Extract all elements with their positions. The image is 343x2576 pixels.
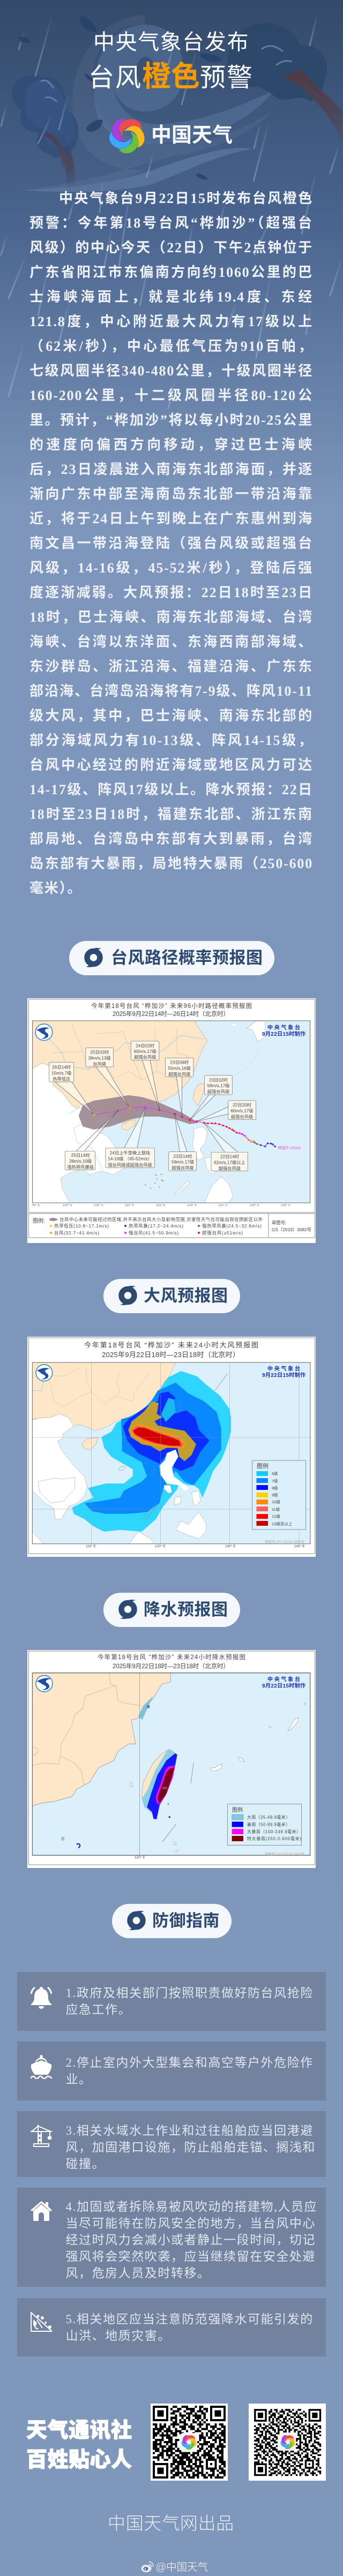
legend: 热带低压(10.8~17.1m/s) [54,1223,109,1229]
section heading: 大风预报图 [103,1279,240,1313]
text block: warning body: 级大风，其中，巴士海峡、南海东北部的 [29,708,313,724]
leader wedges [55,1060,238,1152]
text block: warning body: 岛东部有大暴雨，局地特大暴雨（250-600 [29,856,313,871]
longitude labels: 110° E [125,1204,135,1207]
guidance text: 应急工作。 [65,2003,131,2016]
chart: rainfall forecast map: 120° E [135,1855,145,1859]
credit: 中国天气网出品: 中国天气网出品 [108,2513,234,2533]
legend: rainfall levels: 特大暴雨(250.0-600毫米) [247,1836,301,1841]
longitude labels: 130° E [225,1544,236,1548]
map area: 38m/s,13级 [88,1056,111,1061]
forecast probability swath [79,1095,198,1129]
legend: rainfall levels: 大暴雨（100-249.9毫米） [247,1829,301,1834]
longitude labels: 140° E [294,1544,305,1548]
longitude labels: 100° E [63,1204,72,1207]
legend: gale levels: 7级 [272,1478,278,1483]
map area: 超强台风级 [134,1054,156,1060]
text block: warning body: 毫米）。 [29,880,82,896]
legend: gale levels: 8级 [272,1485,278,1490]
text block: warning body: 的速度向偏西方向移动，穿过巴士海峡 [29,437,313,453]
map title [91,1002,252,1018]
longitude labels: 130° E [250,1204,259,1207]
guidance text: 强风将会突然吹袭，应当继续留在安全处避 [65,2250,316,2263]
section heading: 防御指南 [112,1904,232,1938]
text block: warning body: 后，23日凌晨进入南海东北部海面，并逐 [29,462,313,477]
map area: 28m/s,10级 [69,1158,92,1164]
map title: 2025年9月22日18时—23日18时（北京时） [102,1351,240,1359]
slogan: 百姓贴心人 [26,2449,132,2472]
map area: 桦加沙 (2518) [278,1145,301,1150]
islands [147,1705,150,1708]
Luzon and Philippines [160,1450,189,1490]
icon: crane [31,2125,52,2147]
map title: 今年第18号台风 “桦加沙” 未来24小时降水预报图 [98,1653,245,1661]
track line [94,1107,275,1147]
gridlines [32,1362,310,1544]
legend: gale levels: 11级 [272,1507,280,1512]
agency stamp: 9月22日15时制作 [262,1682,305,1689]
gale level 11 [131,1426,184,1447]
text block: warning body: 预警：今年第18号台风“桦加沙”（超强台 [29,215,313,231]
gale level 9 [128,1402,196,1461]
longitude labels: 135° E [281,1204,290,1207]
map area: 强热带风暴级 [67,1164,94,1170]
legend: gale levels: 10级 [272,1499,280,1504]
text block: warning body: 七级风圈半径340-480公里，十级风圈半径 [29,363,313,379]
title line: 中央气象台发布: 中央气象台发布 [93,31,249,54]
guidance text: 2.停止室内外大型集会和高空等户外危险作 [65,2056,314,2069]
guidance text: 业。 [65,2073,92,2086]
QR code 2 [249,2404,326,2481]
legend: gale levels: 图例 [257,1462,269,1470]
guidance text [65,2200,317,2280]
text block: warning body: 士海峡海面上，就是北纬19.4度、东经 [29,289,313,305]
legend: 审图号: [272,1220,286,1225]
map area: 25日02时 [90,1050,109,1055]
legend: 强台风(41.5~50.9m/s) [129,1230,178,1236]
legend: rainfall levels: 大雨（25-49.9毫米） [247,1814,290,1820]
guidance text: 3.相关水域水上作业和过往船舶应当回港避 [65,2124,314,2137]
track points [159,1109,238,1134]
section heading: 台风路径概率预报图 [69,941,274,975]
agency stamp: 9月22日15时制作 [262,1372,305,1379]
legend: rainfall levels: 暴雨（50-99.9毫米） [247,1822,290,1827]
QR center logo [279,2433,297,2451]
Taiwan [141,1749,177,1819]
text block: warning body: 18时，巴士海峡、南海东北部海域、台湾 [29,609,313,625]
map area: 25日14时 [71,1153,90,1158]
guidance text: 风，加固港口设施，防止船舶走锚、搁浅和 [65,2140,316,2154]
map title: 今年第18号台风 “桦加沙” 未来96小时路径概率预报图 [91,1002,252,1010]
gale level 13 [133,1427,181,1445]
left tree [12,75,79,187]
guidance text: 经过时风力会减小或者静止一段时间，切记 [65,2233,316,2247]
watermark text: @中国天气 [155,2562,208,2573]
panel: guidance 2 [17,2042,326,2100]
legend: rainfall levels [227,1804,301,1846]
callout labels [49,1041,256,1171]
legend: 台风(32.7~41.4m/s) [54,1230,99,1236]
extreme rainstorm band [158,1767,175,1804]
map area [32,1362,310,1544]
longitude labels: 110° E [86,1544,96,1548]
legend: gale levels: 9级 [272,1492,278,1497]
longitude labels: 115° E [156,1204,166,1207]
text block: warning body: 台风中心经过的附近海域或地区风力可达 [29,757,313,773]
legend: 强热带风暴(24.5~32.6m/s) [202,1223,262,1229]
longitude labels [32,1204,290,1207]
map title: 2025年9月22日18时—23日18时（北京时） [113,1662,229,1670]
gale level 10 [130,1425,185,1448]
text block: warning body: 风级）的中心今天（22日）下午2点钟位于 [29,240,313,255]
watermark: weibo [141,2561,208,2573]
legend: 图例: [33,1217,45,1224]
meteorological logo [35,1024,53,1041]
guidance text [65,2313,314,2342]
map area: 58m/s,17级 [207,1083,230,1088]
text block: warning body: （62米/秒），中心最低气压为910百帕， [29,338,313,354]
guidance text: 碰撞。 [65,2157,105,2170]
legend: gale levels: 13级及以上 [272,1521,293,1526]
guidance text: 风，危房人员及时转移。 [65,2266,211,2280]
map area: 24日上午至晚上登陆 [110,1150,150,1155]
legend: gale levels: 12级 [272,1513,280,1519]
map area: 24日02时 [136,1043,154,1048]
leaves [18,16,222,179]
heavy rain band [141,1749,177,1813]
section heading: 大风预报图: 大风预报图 [144,1286,228,1305]
map area: 23日02时 [209,1077,228,1082]
section heading: 台风路径概率预报图: 台风路径概率预报图 [111,948,263,967]
map title [98,1653,245,1670]
slogan [26,2419,132,2472]
guidance text: 山洪、地质灾害。 [65,2329,171,2342]
icon: landslide [31,2312,52,2332]
Taiwan [161,1398,176,1422]
map area: 600 [162,1787,168,1790]
map area: 超强台风级 [219,1165,241,1171]
scattered reefs [118,1466,125,1471]
meteorological logo [36,1365,53,1381]
guidance text: 当尽可能待在防风安全的地方，当台风中心 [65,2217,316,2230]
longitude labels: 120° E [155,1544,166,1548]
agency stamp: 中央气象台 [267,1365,300,1372]
agency stamp [262,1024,305,1037]
guidance text: 1.政府及相关部门按照职责做好防台风抢险 [65,1986,314,2000]
icon: house [31,2201,52,2221]
text block: warning body: 度逐渐减弱。大风预报：22日18时至23日 [29,585,313,600]
text block: warning body: 里。预计，“桦加沙”将以每小时20-25公里 [29,412,313,428]
text block: warning body: 18时至23日18时，福建东北部、浙江东南 [29,807,313,822]
legend: GS（2019）3082号 [272,1227,311,1232]
icon: colored swirl [109,119,145,153]
map title: 2025年9月22日14时—26日14时（北京时） [113,1010,229,1018]
text block: warning body: 部局地、台湾岛中东部有大到暴雨，台湾 [29,831,313,847]
gale level 6 [72,1371,231,1532]
chart: gale forecast map [27,1337,316,1557]
heavy rainstorm band [156,1765,175,1805]
rain streaks [1,14,341,408]
map area: 台风级 [93,1061,106,1066]
agency stamp: 中央气象台 [267,1676,300,1683]
text block: warning body: 风级，14-16级，45-52米/秒），登陆后强 [29,560,313,576]
text block: warning body: 部分海域风力有10-13级、阵风14-15级， [29,733,313,748]
map title [84,1341,258,1359]
legend: rainfall levels: 图例 [232,1806,243,1813]
agency stamp [262,1365,305,1379]
map area: 23日08时 [170,1060,189,1065]
map area [32,1673,310,1855]
text block: warning body: 广东省阳江市东偏南方向约1060公里的巴 [29,265,313,280]
title line: 台风橙色预警: 台风橙色预警 [88,61,253,93]
longitude labels: 120° E [187,1204,197,1207]
text block: warning body: 南文昌一带沿海登陆（强台风级或超强台 [29,536,313,551]
map area: 超强台风级 [172,1165,194,1170]
agency stamp [262,1676,305,1689]
text block: warning body [29,191,313,896]
gale level 8 [123,1391,210,1471]
birds [41,46,292,102]
slogan: 天气通讯社 [26,2419,132,2442]
panel: guidance 3 [17,2111,326,2177]
map area: 23日14时 [174,1154,192,1159]
hero illustration: typhoon, trees and rain [0,15,343,409]
meteorological logo [36,1676,53,1692]
agency stamp: 中央气象台 [267,1024,300,1031]
icon: weibo [141,2561,154,2572]
text block: warning body: 近，将于24日上午到晚上在广东惠州到海 [29,511,313,526]
map area: 60m/s,17级 [230,1108,253,1113]
map area: 超强台风级 [168,1072,190,1077]
guidance text [65,1986,314,2016]
map area: 22日14时 [220,1154,239,1159]
section heading: 降水预报图: 降水预报图 [144,1600,228,1619]
guidance text: 5.相关地区应当注意防范强降水可能引发的 [65,2313,314,2325]
longitude labels: 审图号:GS (2019) 3082号 [265,1539,304,1544]
map area: 55m/s,16级 [168,1066,191,1071]
chart: rainfall forecast map: 审图号:GS (2019) 3082号 [265,1851,304,1856]
typhoon swirl [21,15,273,192]
text block: warning body: 121.8度，中心附近最大风力有17级以上 [29,314,313,329]
map area: 强台风级或超强台风级 [108,1162,152,1168]
longitude labels: 95° E [32,1204,40,1207]
chart: typhoon track probability map [27,998,316,1243]
icon: ship [31,2055,52,2079]
map area: 26日14时 [52,1064,71,1069]
legend: gale levels: 6级 [272,1471,278,1476]
map area: 62m/s,17级以上 [214,1159,245,1165]
section heading: 防御指南: 防御指南 [152,1911,220,1930]
map area: 22日20时 [233,1102,251,1108]
text block: warning body: 部沿海、台湾岛沿海将有7-9级、阵风10-11 [29,683,313,699]
gale level 7 [85,1383,221,1514]
legend: 热带风暴(17.2~24.4m/s) [129,1223,183,1229]
text block: warning body: 中央气象台9月22日15时发布台风橙色 [59,191,313,206]
guidance text [65,2124,316,2170]
text block: warning body: 14-17级、阵风17级以上。降水预报：22日 [29,782,313,797]
map area: 60m/s,17级 [134,1049,156,1054]
icon: bell [31,1987,52,2009]
text block: warning body: 东沙群岛、浙江沿海、福建沿海、广东东 [29,659,313,674]
map area: 14-16级 （45-52m/s） [108,1156,152,1162]
logo wordmark: 中国天气 [151,124,233,147]
panel: guidance 4 [17,2188,326,2287]
panel: guidance 1 [17,1972,326,2031]
map area: 热带低压 [53,1076,70,1081]
text block: warning body: 海峡、台湾以东洋面、东海西南部海域、 [29,634,313,650]
guidance text: 4.加固或者拆除易被风吹动的搭建物,人员应 [65,2200,317,2213]
rainstorm band [147,1753,177,1819]
QR code 1 [151,2404,228,2481]
panel: guidance 5 [17,2298,326,2356]
guidance text [65,2056,314,2086]
section heading: 降水预报图 [103,1593,240,1627]
QR center logo [180,2433,198,2452]
map area [33,1021,310,1203]
legend [29,1214,315,1238]
map area: 超强台风级 [207,1089,229,1094]
map area: 15m/s,7级 [51,1071,72,1076]
longitude labels: 105° E [94,1204,103,1207]
text block: warning body: 160-200公里，十二级风圈半径80-120公 [29,388,313,403]
legend: 台风中心未来可能经过的区域,并不表示台风大小及影响范围,灾害性天气也可能出现在阴影区以外 [59,1217,263,1222]
map title: 今年第18号台风 “桦加沙” 未来24小时大风预报图 [84,1341,258,1349]
longitude labels [86,1539,305,1548]
agency stamp: 9月22日15时制作 [262,1030,305,1037]
legend: gale levels [252,1460,305,1530]
text block: warning body: 渐向广东中部至海南岛东北部一带沿海靠 [29,486,313,502]
chart: rainfall forecast map [27,1650,316,1868]
right tree [227,23,343,145]
map area: 超强台风级 [231,1114,253,1119]
longitude labels: 125° E [218,1204,228,1207]
map area: 58m/s,17级 [172,1159,194,1165]
legend: 超强台风(≥51m/s) [202,1230,243,1236]
logo: 中国天气 [109,119,233,153]
